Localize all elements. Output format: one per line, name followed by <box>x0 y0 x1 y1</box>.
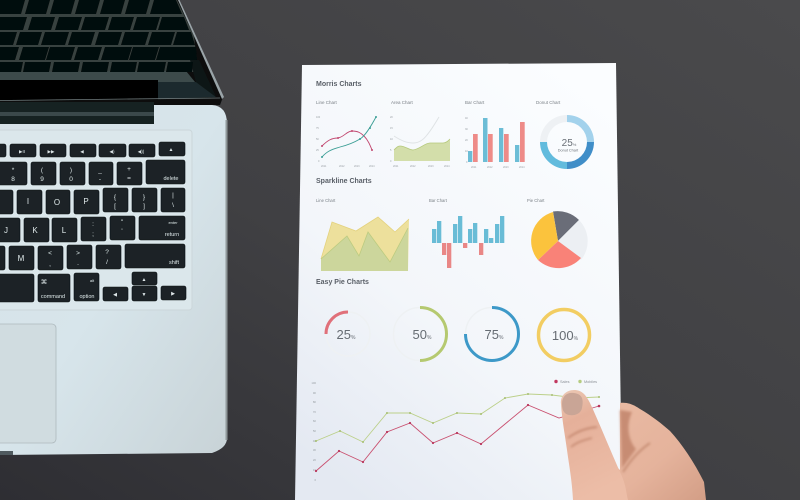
y axis labels: 40 <box>313 439 316 443</box>
morris area chart: 15 <box>390 127 393 130</box>
key labels: J <box>4 226 8 235</box>
key labels: } <box>143 194 146 201</box>
morris bar chart: 0 <box>466 161 468 164</box>
key labels: ◀ <box>113 292 117 298</box>
morris donut chart <box>536 100 594 169</box>
easy pie 75 percent: 75% <box>485 327 504 342</box>
morris area chart: 10 <box>390 138 393 141</box>
hinge <box>0 102 154 124</box>
legend <box>554 380 597 384</box>
key labels: ' <box>121 228 123 235</box>
morris area chart: 0 <box>390 160 392 163</box>
morris area chart: 5 <box>390 149 392 152</box>
key labels: P <box>83 197 89 206</box>
y axis labels <box>311 381 316 482</box>
y axis labels: 90 <box>313 391 316 395</box>
easy pie 50 percent: 50% <box>413 327 432 342</box>
key labels: ▶ <box>171 291 175 297</box>
key labels: O <box>54 198 60 207</box>
key labels: ▼ <box>142 292 146 298</box>
key labels: , <box>49 261 51 268</box>
laptop <box>0 0 228 455</box>
bottom line chart <box>311 380 600 482</box>
morris line chart <box>316 100 377 168</box>
red series <box>315 404 600 472</box>
charts printed on paper <box>311 81 600 482</box>
key labels: | <box>172 192 174 199</box>
key labels: M <box>18 254 25 263</box>
y axis labels: 100 <box>311 381 316 385</box>
thumb <box>561 390 628 500</box>
key labels: shift <box>169 260 180 266</box>
palm shadow beside paper edge <box>620 410 636 468</box>
legend: Mobiles <box>584 380 597 384</box>
key labels: < <box>48 250 52 257</box>
key labels: _ <box>97 167 102 174</box>
key labels: L <box>62 226 67 235</box>
morris line chart: Line Chart <box>316 100 338 105</box>
key labels: 0 <box>69 176 73 183</box>
key labels: . <box>77 260 79 267</box>
morris line chart: 2011 <box>321 165 327 168</box>
morris donut chart: Donut Chart <box>558 148 579 152</box>
morris line chart: 0 <box>318 160 320 163</box>
morris line chart: 2014 <box>369 165 375 168</box>
easy pie 50 percent <box>394 308 446 360</box>
morris bar chart: Bar Chart <box>465 100 485 105</box>
heading: Easy Pie Charts: Easy Pie Charts <box>316 279 369 286</box>
thumbnail <box>562 393 583 415</box>
paper sheet <box>295 63 622 500</box>
key labels: = <box>127 175 131 182</box>
key labels: : <box>92 221 94 228</box>
key labels: command <box>41 294 65 300</box>
morris bar chart: 20 <box>465 139 468 142</box>
morris bar chart: 30 <box>465 128 468 131</box>
key labels: ) <box>70 167 72 174</box>
y axis labels: 70 <box>313 410 316 414</box>
palm crease <box>623 443 650 472</box>
easy pie 25 percent <box>326 312 370 356</box>
trackpad <box>0 324 56 443</box>
morris bar chart: 2014 <box>519 166 525 169</box>
heading: Sparkline Charts: Sparkline Charts <box>316 178 372 185</box>
key labels: 9 <box>40 176 44 183</box>
key labels: enter <box>168 220 178 225</box>
easy pie 100 percent: 100% <box>552 328 579 343</box>
key labels: + <box>127 166 131 173</box>
key labels: ( <box>41 167 44 174</box>
sparkline pie chart: Pie Chart <box>527 198 545 203</box>
morris area chart: 2011 <box>393 165 399 168</box>
morris bar chart: 10 <box>465 150 468 153</box>
y axis labels: 30 <box>313 448 316 452</box>
sparkline bar chart: Bar Chart <box>429 198 448 203</box>
morris area chart: 2013 <box>428 165 434 168</box>
sparkline line chart: Line Chart <box>316 198 336 203</box>
hand holding the paper <box>561 390 706 500</box>
y axis labels: 60 <box>313 419 316 423</box>
morris area chart: Area Chart <box>391 100 414 105</box>
y axis labels: 80 <box>313 400 316 404</box>
morris area chart <box>390 100 450 168</box>
key labels: ? <box>105 249 109 256</box>
key labels: ▲ <box>169 147 173 153</box>
easy pie 25 percent: 25% <box>337 327 356 342</box>
key labels: ] <box>143 203 145 210</box>
morris area chart: 2014 <box>444 165 450 168</box>
key labels: * <box>12 167 15 174</box>
key labels: ⌘ <box>41 278 48 286</box>
key labels: ▶▶ <box>48 149 55 154</box>
morris line chart: 100 <box>316 116 321 119</box>
y axis labels: 20 <box>313 458 316 462</box>
key labels: delete <box>164 176 178 182</box>
morris donut chart: 25% <box>562 138 577 149</box>
easy pie 100 percent <box>538 310 590 360</box>
morris line chart: 50 <box>316 138 319 141</box>
key labels: ; <box>92 231 94 238</box>
morris donut chart: Donut Chart <box>536 100 561 105</box>
key labels: K <box>32 226 38 235</box>
sparkline bar chart <box>429 198 504 268</box>
sparkline pie chart <box>527 198 588 268</box>
morris area chart: 2012 <box>410 165 416 168</box>
morris line chart: 25 <box>316 149 319 152</box>
green series <box>315 393 600 443</box>
key labels: { <box>114 194 117 201</box>
y axis labels: 10 <box>313 468 316 472</box>
y axis labels: 0 <box>314 478 316 482</box>
morris area chart: 20 <box>390 116 393 119</box>
key labels <box>4 147 180 300</box>
sparkline line chart <box>316 198 409 271</box>
key labels: return <box>165 232 179 238</box>
laptop screen with reflected keyboard <box>0 0 224 105</box>
key labels: 8 <box>11 176 15 183</box>
morris bar chart: 2011 <box>471 166 477 169</box>
keys <box>0 142 186 302</box>
heading: Morris Charts: Morris Charts <box>316 81 362 88</box>
key labels: alt <box>90 278 95 283</box>
key labels: ▶II <box>19 149 25 154</box>
morris bar chart: 40 <box>465 117 468 120</box>
key labels: \ <box>172 202 174 209</box>
morris line chart: 2013 <box>354 165 360 168</box>
key labels: option <box>80 294 94 300</box>
morris line chart: 2012 <box>339 165 345 168</box>
morris line chart: 75 <box>316 127 319 130</box>
key labels: [ <box>114 203 116 210</box>
palm <box>588 403 706 500</box>
key labels: ◀)) <box>138 149 145 154</box>
key labels: ◀ <box>80 149 84 154</box>
key labels: " <box>121 219 124 226</box>
laptop base <box>0 105 227 455</box>
key labels: ▲ <box>142 277 146 283</box>
key labels: I <box>27 197 29 206</box>
key labels: > <box>76 250 80 257</box>
legend: Sales <box>560 380 570 384</box>
y axis labels: 50 <box>313 429 316 433</box>
key labels: / <box>106 259 108 266</box>
easy pie 75 percent <box>466 308 518 360</box>
morris bar chart <box>465 100 525 169</box>
morris bar chart: 2013 <box>503 166 509 169</box>
key labels: - <box>99 176 101 183</box>
key labels: ◀) <box>110 149 115 154</box>
morris bar chart: 2012 <box>487 166 493 169</box>
keyboard well <box>0 130 192 310</box>
thumb knuckle creases <box>568 427 597 447</box>
